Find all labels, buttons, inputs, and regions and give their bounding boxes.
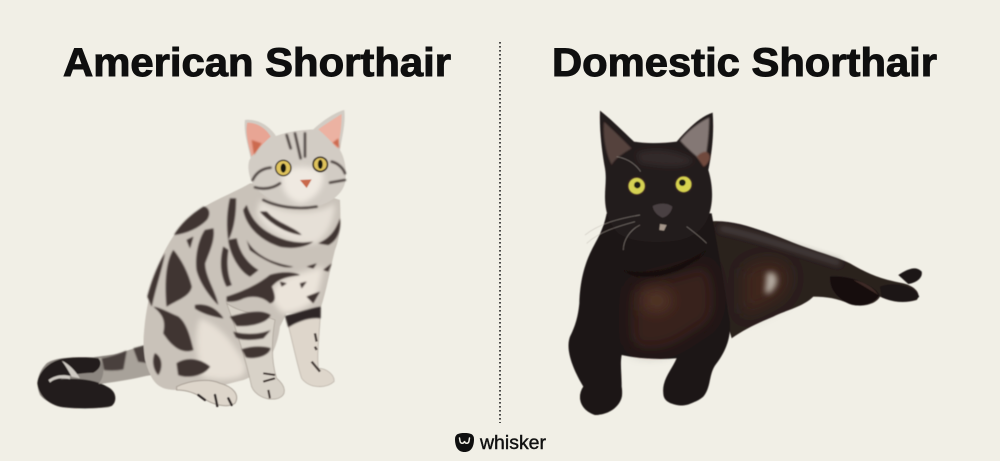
head and ears <box>245 110 346 208</box>
nose <box>300 179 312 188</box>
tail <box>37 345 152 408</box>
body <box>707 221 919 338</box>
illustration: Domestic Shorthair black cat <box>569 111 922 415</box>
logo: whisker <box>455 433 547 454</box>
logo icon <box>455 433 474 452</box>
heading: Domestic Shorthair: Domestic Shorthair <box>552 41 937 85</box>
left foreleg <box>227 303 284 399</box>
fur stripes <box>147 198 340 377</box>
right foreleg <box>286 308 334 387</box>
nose and muzzle <box>653 204 672 217</box>
eyes <box>628 177 646 195</box>
body <box>144 183 340 391</box>
head and ears <box>585 111 713 250</box>
tail <box>898 268 922 284</box>
back foot <box>177 380 237 406</box>
heading: American Shorthair: American Shorthair <box>63 41 451 85</box>
eyes <box>275 160 292 176</box>
dotted divider <box>499 42 501 423</box>
illustration: American Shorthair tabby cat <box>37 110 346 408</box>
whiskers <box>585 157 707 250</box>
logo wordmark: whisker <box>479 433 547 454</box>
head stripes <box>253 133 345 208</box>
chest and forelegs <box>569 213 730 415</box>
